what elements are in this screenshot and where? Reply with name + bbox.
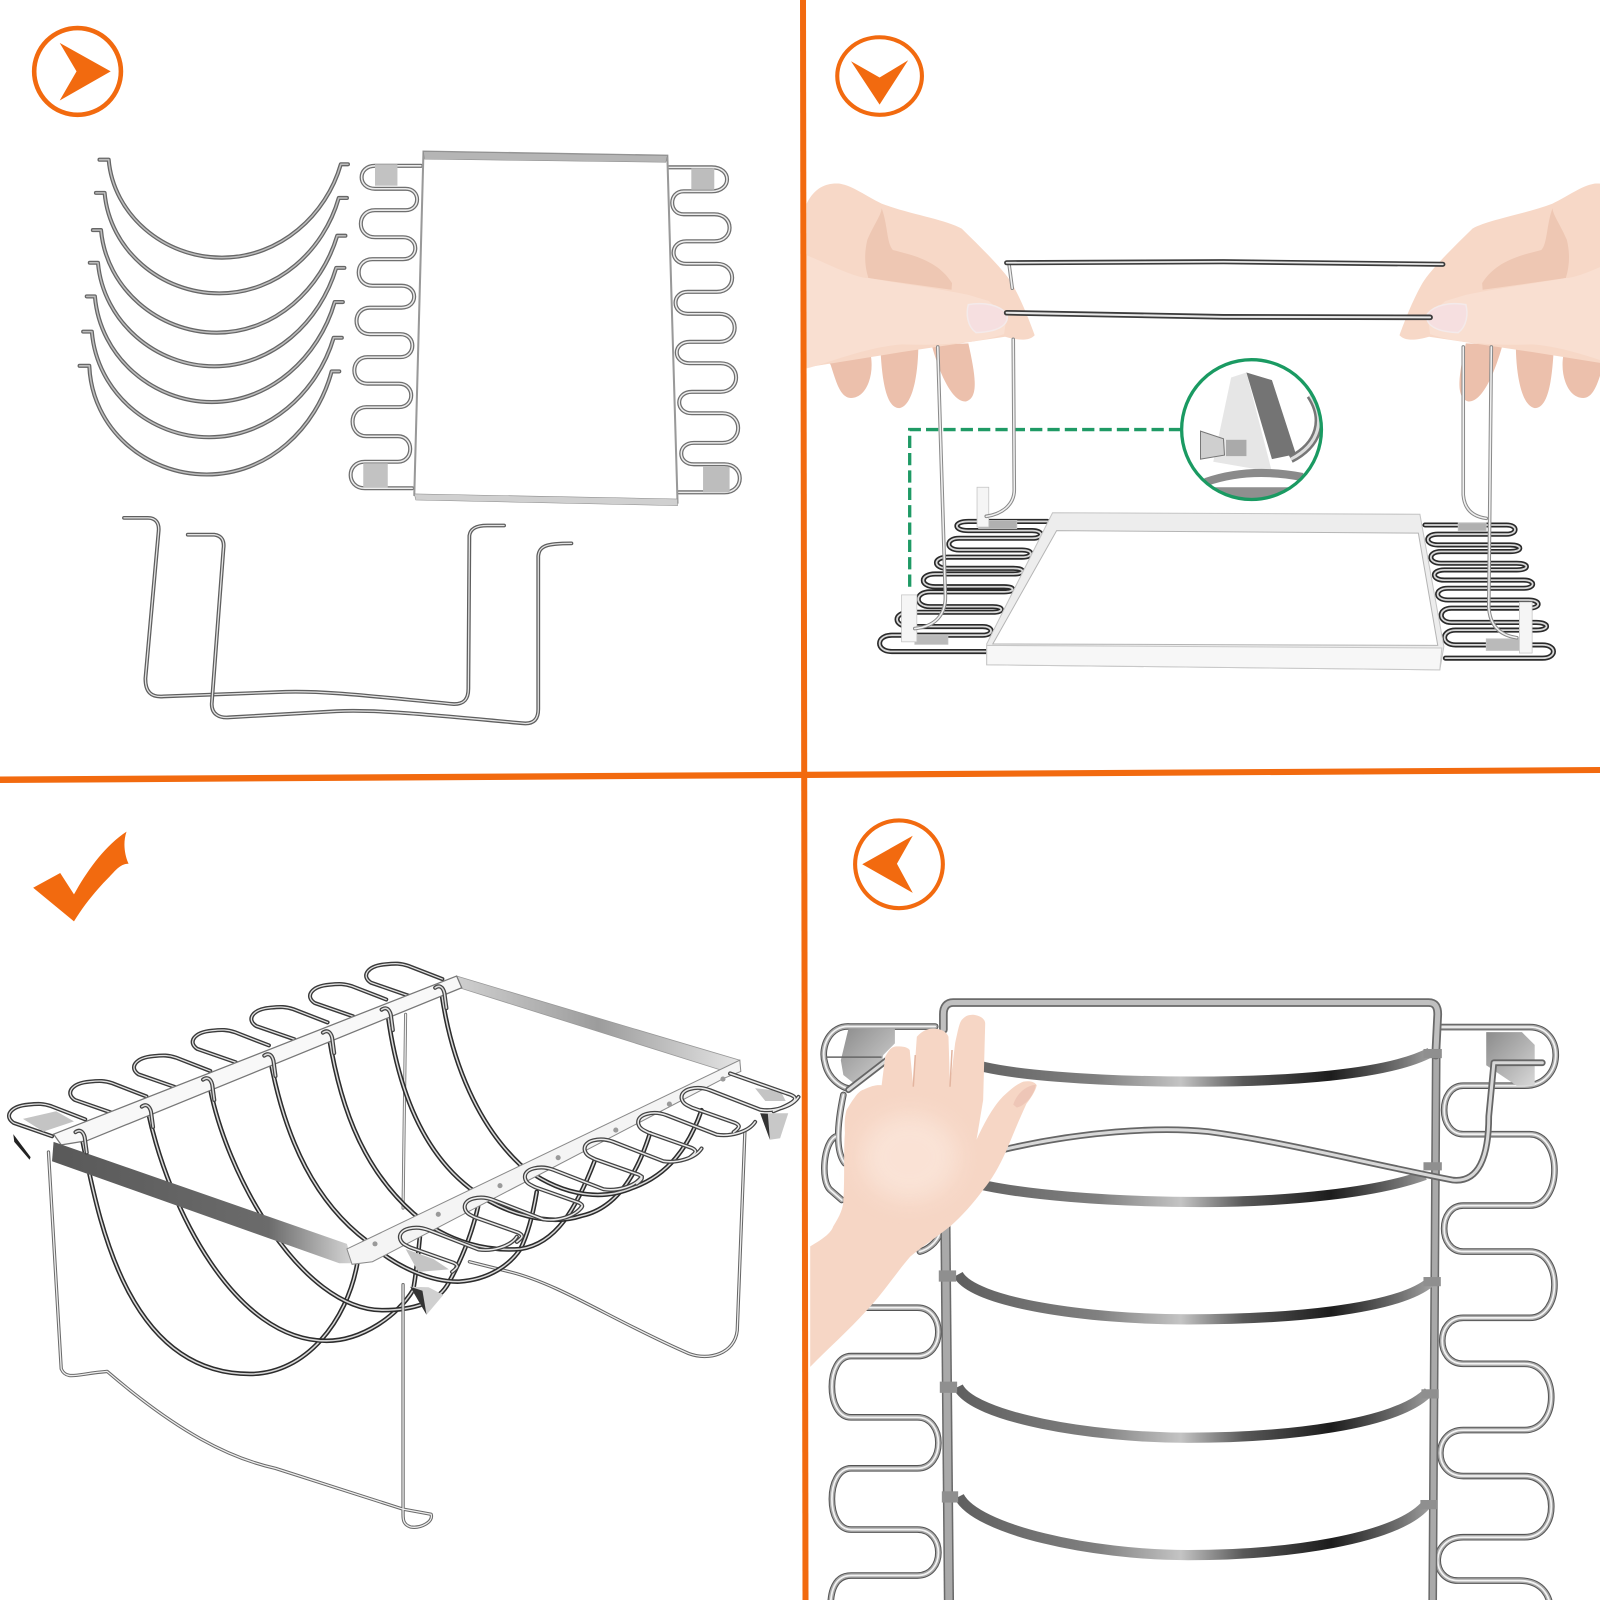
back legs [403, 1014, 745, 1356]
hand [810, 1015, 1037, 1367]
icon: down arrow in circle [837, 37, 922, 115]
rack serpentine wires [880, 521, 1553, 658]
rectangular frame bars [52, 976, 741, 1264]
leg wire [848, 1060, 1542, 1180]
hinge tabs [827, 1029, 1542, 1086]
end tabs [23, 1088, 786, 1272]
frame rails and handle [943, 1003, 1438, 1600]
upper finger loops [9, 964, 442, 1136]
panel: disassembled parts [34, 28, 740, 723]
icon: orange check mark [33, 832, 129, 921]
folding frame [987, 513, 1444, 670]
folding legs [124, 518, 571, 723]
curved ribs seen from above [939, 1049, 1442, 1555]
hand: right [1399, 184, 1600, 408]
dashed connector [910, 430, 1180, 587]
serpentine side wires [824, 1026, 1556, 1600]
panel: lifting the legs [807, 37, 1600, 670]
hinge clips [902, 487, 1532, 653]
triangular clips [13, 1113, 788, 1315]
rib hooks on back rail [76, 986, 446, 1153]
icon: right arrow in circle [34, 28, 121, 115]
hand: left [807, 184, 1035, 408]
vertical leg wires [915, 265, 1517, 638]
icon: left arrow in circle [855, 820, 943, 908]
callout: clip detail in green circle [1182, 360, 1321, 508]
front finger loops [400, 1073, 798, 1272]
handle rods [1007, 262, 1443, 317]
curved ribs [82, 991, 702, 1374]
ribs: seven curved wires [80, 160, 348, 474]
flat frame with serpentine sides [351, 152, 740, 506]
panel: assembled rack [9, 832, 798, 1527]
panel: folded rack held by hand [810, 820, 1556, 1600]
rail holes [372, 1077, 726, 1246]
front legs [48, 1152, 431, 1527]
